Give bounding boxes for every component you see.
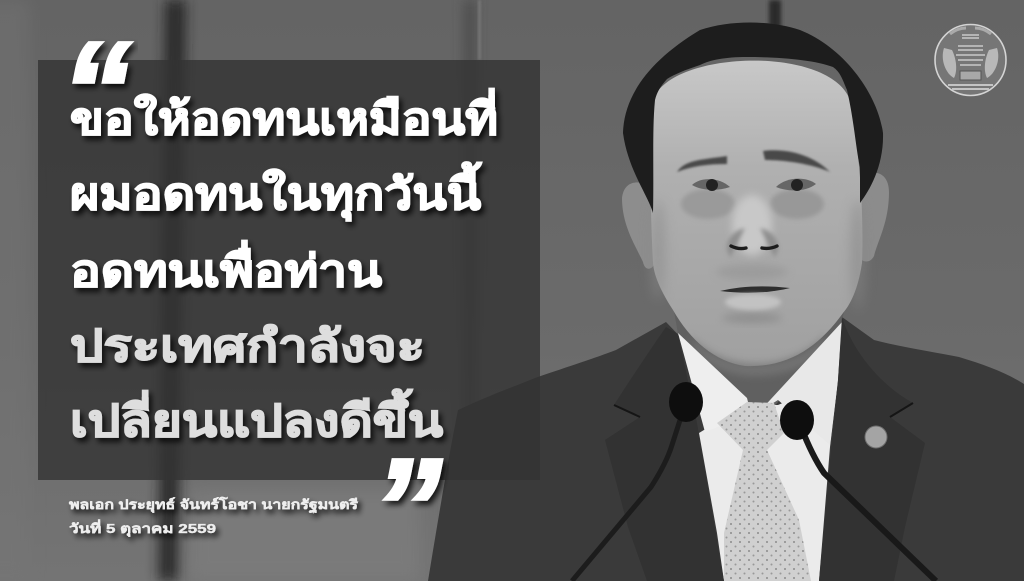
lapel pin [865, 426, 887, 448]
necktie [717, 402, 811, 581]
shirt and collar [678, 322, 842, 581]
attribution [69, 496, 358, 537]
opening quotation mark: “ [61, 12, 131, 169]
mouth [720, 286, 790, 310]
hair [623, 22, 883, 213]
neck [672, 290, 848, 414]
right ear [860, 173, 889, 262]
quote line 1: ขอให้อดทนเหมือนที่ [70, 88, 498, 144]
left ear [622, 182, 655, 269]
nose [727, 195, 778, 258]
portrait photograph [428, 22, 1024, 581]
right microphone [780, 400, 936, 581]
face [651, 61, 862, 366]
jacket lapels [605, 317, 925, 581]
government seal [935, 24, 1006, 96]
facial shading [651, 189, 865, 376]
eyebrows and eyes [677, 150, 830, 191]
quote text [70, 88, 498, 446]
dark quote panel [38, 60, 540, 480]
left microphone [572, 382, 703, 581]
quote line 3: อดทนเพื่อท่าน [70, 240, 382, 296]
quote line 2: ผมอดทนในทุกวันนี้ [70, 161, 483, 222]
quote line 4: ประเทศกำลังจะ [70, 322, 425, 371]
suit jacket [428, 317, 1024, 581]
attribution date: วันที่ 5 ตุลาคม 2559 [69, 519, 216, 537]
quote line 5: เปลี่ยนแปลงดีขึ้น [70, 388, 443, 446]
attribution name: พลเอก ประยุทธ์ จันทร์โอชา นายกรัฐมนตรี [69, 496, 358, 514]
